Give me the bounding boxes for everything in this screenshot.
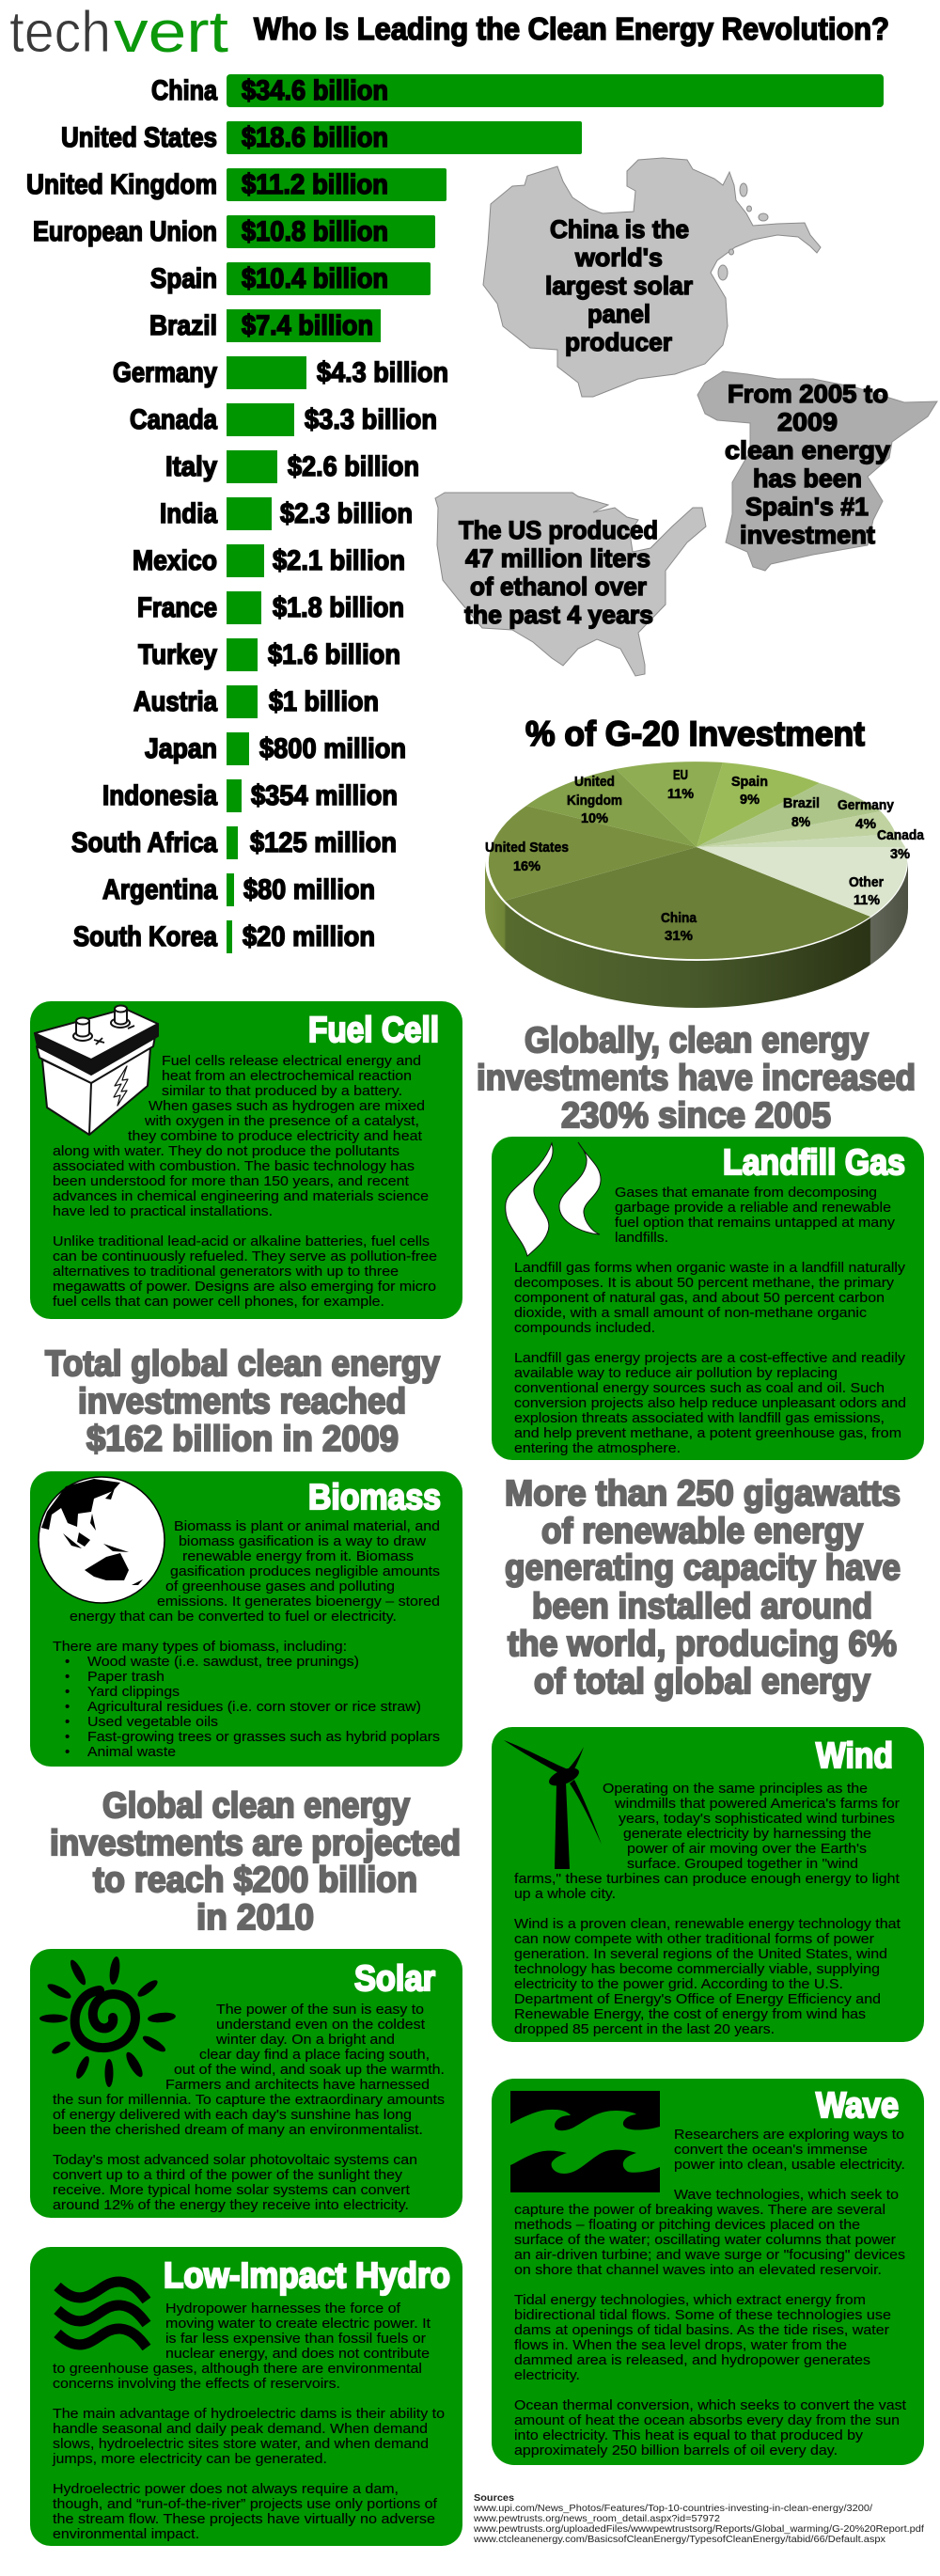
callout text: 47 million liters [465,544,650,573]
body text: the stream flow. These projects have virtually no adverse [53,2511,435,2527]
body text: methods – floating or pitching devices placed on the [514,2217,860,2233]
body text: farms," these turbines can produce enough energy to light [514,1871,901,1887]
body text: of energy delivered with each day's sunshine has long [53,2107,412,2123]
body text: bidirectional tidal flows. Some of these technologies use [514,2307,891,2323]
chart heading: % of G-20 Investment: % of G-20 Investment [525,715,865,753]
callout text: From 2005 to [728,380,888,408]
body text: dammed area is released, and hydropower generates [514,2352,870,2368]
body text: been understood for more than 150 years, and recent [53,1173,410,1189]
slice: China [505,847,870,959]
statistic: total global investments [45,1344,440,1459]
body text [53,1518,440,1655]
body text: fuel cells that can power cell phones, for example. [53,1294,384,1310]
body text: landfills. [615,1230,668,1246]
row: Germany: Germany [113,357,217,388]
biomass list: Yard clippings [87,1684,180,1700]
slice: EU [616,762,723,847]
body text: There are many types of biomass, including: [53,1639,347,1655]
body text: Wave technologies, which seek to [674,2187,899,2203]
statistic: 2010 projection: investments are projected [50,1824,461,1863]
body text: surface. Grouped together in "wind [627,1856,858,1872]
row: Brazil: $7.4 billion [242,310,373,341]
panel background [30,1949,462,2218]
body text: associated with combustion. The basic technology has [53,1158,415,1174]
body text: garbage provide a reliable and renewable [615,1200,891,1216]
pie labels: 16% [513,859,540,874]
body text: of greenhouse gases and polluting [165,1579,395,1594]
sources: www.pewtrusts.org/news_room_detail.aspx?id=57972 [473,2513,720,2524]
row: China: $34.6 billion [242,75,388,106]
body text: they combine to produce electricity and heat [128,1128,423,1144]
body text: Gases that emanate from decomposing [615,1185,877,1201]
row: India [160,497,413,530]
row: Brazil [149,309,381,342]
row: Brazil: Brazil [149,310,217,341]
row: China [151,74,884,107]
body text: explosion threats associated with landfill gas emissions, [514,1410,885,1426]
pie labels: 3% [890,847,910,862]
body text: Unlike traditional lead-acid or alkaline batteries, fuel cells [53,1233,430,1249]
row: Italy [165,450,419,483]
callout text: The US produced [459,516,658,544]
row: France [137,591,404,624]
pie labels [485,768,925,944]
body text: an air-driven turbine; and wave surge or "focusing" devices [514,2247,905,2263]
body text: The power of the sun is easy to [216,2002,424,2018]
biomass list: • [65,1654,70,1670]
body text: dropped 85 percent in the last 20 years. [514,2021,775,2037]
biomass list: Paper trash [87,1669,164,1685]
body text: have led to practical installations. [53,1203,273,1219]
panel: Fuel Cell [30,1001,462,1319]
statistic: renewable capacity [505,1474,901,1702]
logo: techvert [9,0,228,65]
body text: into electricity. This heat is equal to that produced by [514,2427,864,2443]
statistic: investment growth [477,1021,916,1136]
body text: Researchers are exploring ways to [674,2127,904,2143]
body text: available way to reduce air pollution by replacing [514,1365,838,1381]
callout text: Spain's #1 [745,493,869,521]
map: United States [435,493,706,676]
heading: Low-Impact Hydro [164,2256,450,2296]
row: United States: United States [61,122,217,153]
map: China [483,158,821,397]
sources: Sources [474,2492,514,2504]
body text: flows in. When the sea level drops, water from the [514,2337,847,2353]
row: China: China [151,75,217,106]
body text: approximately 250 billion barrels of oil every day. [514,2442,838,2458]
panel background [30,2247,462,2546]
pie side [485,861,908,1008]
icon: rising gas [506,1142,601,1256]
callout text: has been [753,464,862,493]
statistic: renewable capacity: generating capacity have [505,1548,901,1588]
slice: Germany [697,811,896,847]
body text: megawatts of power. Designs are also emerging for micro [53,1279,436,1295]
row: Argentina [102,873,375,906]
row: Germany [113,356,448,389]
sources: www.pewtrusts.org/uploadedFiles/wwwpewtrustsorg/Reports/Global_warming/G-20%20Report.pdf [473,2523,924,2535]
pie labels: 10% [581,811,608,826]
row: Japan [145,732,406,765]
row: Germany: $4.3 billion [317,357,448,388]
row: United States [61,121,582,154]
pie labels: Spain [731,775,768,790]
row: Mexico: Mexico [133,545,217,576]
body text: Ocean thermal conversion, which seeks to convert the vast [514,2397,907,2413]
sources: www.ctcleanenergy.com/BasicsofCleanEnergy/TypesofCleanEnergy/tabid/66/Default.aspx [473,2534,886,2545]
body text: windmills that powered America's farms for [614,1796,900,1812]
callout text: of ethanol over [470,573,647,601]
row: South Africa: South Africa [71,827,217,858]
row: Turkey: $1.6 billion [268,639,400,670]
statistic: investment growth: investments have increased [477,1059,916,1098]
body text [52,2301,445,2542]
row: Spain [150,262,431,295]
body text: surface of the water; oscillating water columns that power [514,2232,896,2248]
slice: United States [489,806,697,901]
row: European Union: European Union [33,216,217,247]
body text: alternatives to traditional generators with up to three [53,1264,399,1280]
callout text: largest solar [545,272,693,300]
pie labels: 9% [740,793,760,808]
body text: emissions. It generates bioenergy – stored [157,1594,440,1610]
map: Spain [697,371,937,571]
callout text: investment [740,521,875,549]
pie labels: Canada [877,828,925,843]
body text: electricity to the power grid. According to the U.S. [514,1976,843,1992]
sources [473,2492,924,2545]
biomass list: Agricultural residues (i.e. corn stover or rice straw) [87,1699,421,1715]
body text: is far less expensive than fossil fuels or [165,2331,426,2347]
row: Italy: $2.6 billion [288,451,419,482]
body text: Renewable Energy, the cost of energy from wind has [514,2006,866,2022]
row: Argentina: Argentina [102,874,217,905]
body text: component of natural gas, and about 50 percent carbon [514,1290,885,1306]
callout text: panel [588,300,650,328]
statistic: renewable capacity: More than 250 gigawatts [505,1474,901,1514]
body text: heat from an electrochemical reaction [162,1068,412,1084]
row: Japan: $800 million [259,733,406,764]
biomass list: Fast-growing trees or grasses such as hybrid poplars [87,1729,440,1745]
panel: Landfill Gas [492,1137,924,1460]
body text: Today's most advanced solar photovoltaic systems can [53,2152,417,2168]
pie labels: Other [849,875,884,890]
body text: been the cherished dream of many an environmentalist. [53,2122,423,2138]
row: Spain: $10.4 billion [242,263,388,294]
row: Indonesia: $354 million [251,780,398,811]
statistic: total global investments: Total global clean energy [45,1344,440,1384]
logo: techvert: vert [114,0,228,65]
body text: energy that can be converted to fuel or electricity. [70,1609,397,1625]
body text: out of the wind, and soak up the warmth. [174,2062,445,2078]
body text: Biomass is plant or animal material, and [174,1518,440,1534]
row: Canada [130,403,437,436]
body text: up a whole city. [514,1886,616,1902]
body text: electricity. [514,2367,580,2383]
row: Austria [133,685,379,718]
callout text [725,380,890,549]
pie labels: China [661,911,697,926]
slice: United Kingdom [526,769,697,847]
body text: though, and “run-of-the-river” projects use only portions of [53,2496,438,2512]
body text: dams at openings of tidal basins. As the tide rises, water [514,2322,889,2338]
row: France: $1.8 billion [273,592,404,623]
body text: Operating on the same principles as the [603,1781,868,1797]
biomass list: • [65,1729,70,1745]
logo: techvert: tech [9,0,111,65]
heading: Solar [354,1959,435,1999]
panel: Solar [30,1949,462,2218]
body text: on shore that channel waves into an elevated reservoir. [514,2262,882,2278]
icon: spiral sun [39,1956,176,2087]
slice: Brazil [697,783,881,847]
row: Argentina: $80 million [243,874,375,905]
heading: Landfill Gas [723,1143,905,1183]
biomass list [65,1654,440,1760]
pie labels: 4% [855,817,876,832]
biomass list: Used vegetable oils [87,1714,218,1730]
row: Austria: Austria [133,686,217,717]
row: Mexico: $2.1 billion [273,545,405,576]
biomass list: • [65,1699,70,1715]
body text: dioxide, with a small amount of non-methane organic [514,1305,868,1321]
row: India: India [160,498,217,529]
body text: compounds included. [514,1320,655,1336]
panel background [492,1137,924,1460]
callout text: clean energy [725,436,890,464]
body text: conversion projects also help reduce unpleasant odors and [514,1395,906,1411]
statistic: 2010 projection [50,1786,461,1938]
body text: convert the ocean's immense [674,2142,868,2158]
biomass list: • [65,1714,70,1730]
icon: water waves [57,2282,147,2348]
body text: Landfill gas energy projects are a cost-effective and readily [514,1350,906,1366]
icon: wind turbine [504,1740,602,1869]
body text: can be continuously refueled. They serve as pollution-free [53,1249,437,1264]
body text: decomposes. It is about 50 percent methane, the primary [514,1275,895,1291]
body text: slows, hydroelectric sites store water, and when demand [53,2436,429,2452]
statistic: total global investments: $162 billion in 2009 [86,1420,399,1459]
body text: advances in chemical engineering and materials science [53,1188,429,1204]
body text: similar to that produced by a battery. [162,1083,402,1099]
row: Indonesia: Indonesia [102,780,217,811]
biomass list: • [65,1669,70,1685]
body text: Hydroelectric power does not always require a dam, [53,2481,399,2497]
body text [514,1781,901,2037]
pie labels: 8% [791,815,810,830]
statistic: investment growth: 230% since 2005 [561,1096,831,1136]
body text: Tidal energy technologies, which extract energy from [514,2292,866,2308]
body text: environmental impact. [53,2526,199,2542]
body text: around 12% of the energy they receive into electricity. [53,2197,409,2213]
map callout: Spain [697,371,937,571]
body text: When gases such as hydrogen are mixed [149,1098,425,1114]
row: United States: $18.6 billion [242,122,388,153]
body text: Landfill gas forms when organic waste in a landfill naturally [514,1260,906,1276]
pie labels: EU [673,768,688,783]
title: Who Is Leading the Clean Energy Revolution? [254,11,889,46]
body text: concerns involving the effects of reservoirs. [53,2376,340,2392]
statistic: renewable capacity: the world, producing 6% [508,1625,897,1664]
row: Italy: Italy [165,451,217,482]
body text: amount of heat the ocean absorbs every day from the sun [514,2412,900,2428]
panel: Wind [492,1727,924,2042]
row: Turkey: Turkey [138,639,217,670]
body text: power of air moving over the Earth's [627,1841,867,1857]
pie labels: United States [485,840,569,856]
map callout: China [483,158,821,397]
body text: Wind is a proven clean, renewable energy technology that [514,1916,901,1932]
body text: fuel option that remains untapped at many [615,1215,896,1231]
row: South Africa: $125 million [250,827,397,858]
body text: gasification produces negligible amounts [170,1563,440,1579]
row: South Korea: $20 million [243,921,375,952]
panel: Biomass [30,1471,462,1767]
panel: Wave [492,2079,924,2465]
row: France: France [137,592,217,623]
body text: along with water. They do not produce the pollutants [53,1143,400,1159]
panel: Low-Impact Hydro [30,2247,462,2546]
pie labels: Germany [838,798,894,813]
statistic: investment growth: Globally, clean energy [525,1021,869,1060]
row: South Korea [73,920,375,953]
body text: convert up to a third of the power of the sunlight they [53,2167,403,2183]
slice: Spain [697,762,820,847]
body text: clear day find a place facing south, [199,2047,430,2063]
row: India: $2.3 billion [280,498,413,529]
pie labels: 31% [665,929,693,944]
row: Canada: Canada [130,404,217,435]
row: Spain: Spain [150,263,217,294]
biomass list: Wood waste (i.e. sawdust, tree prunings) [87,1654,359,1670]
body text: generate electricity by harnessing the [623,1826,871,1842]
body text: The main advantage of hydroelectric dams is their ability to [53,2406,445,2422]
body text: and help prevent methane, a potent greenhouse gas, from [514,1425,901,1441]
body text: Farmers and architects have harnessed [165,2077,430,2093]
body text: capture the power of breaking waves. There are several [514,2202,885,2218]
body text: technology has become commercially viable, supplying [514,1961,880,1977]
row: Turkey [138,638,400,671]
panel background [492,2079,924,2465]
pie labels: Brazil [783,796,820,811]
icon: waves [510,2091,660,2192]
callout text: China is the [550,215,689,243]
statistic: renewable capacity: of renewable energy [541,1512,863,1551]
icon: battery [35,1006,158,1135]
body text: renewable energy from it. Biomass [182,1548,414,1564]
statistic: total global investments: investments reached [78,1382,406,1422]
row: United Kingdom [26,168,446,201]
body text: nuclear energy, and does not contribute [165,2346,430,2362]
statistic: 2010 projection: to reach $200 billion [93,1861,417,1900]
row: South Korea: South Korea [73,921,217,952]
statistic: renewable capacity: of total global energy [534,1662,870,1702]
statistic: 2010 projection: in 2010 [196,1898,314,1938]
panel background [30,1471,462,1767]
body text: handle seasonal and daily peak demand. When demand [53,2421,428,2437]
body text [53,2002,445,2213]
body text: entering the atmosphere. [514,1440,681,1456]
body text: moving water to create electric power. It [165,2316,431,2332]
body text: understand even on the coldest [216,2017,426,2033]
body text: receive. More typical home solar systems can convert [53,2182,411,2198]
heading: Fuel Cell [308,1011,439,1050]
body text: Fuel cells release electrical energy and [162,1053,421,1069]
pie labels: United [574,775,615,790]
bar chart: clean energy investment by country [26,74,884,953]
panel background [492,1727,924,2042]
row: Austria: $1 billion [269,686,379,717]
biomass list: • [65,1744,70,1760]
body text: to greenhouse gases, although there are environmental [53,2361,422,2377]
body text [53,1053,437,1310]
body text: with oxygen in the presence of a catalyst, [144,1113,419,1129]
body text: winter day. On a bright and [215,2032,395,2048]
body text: the sun for millennia. To capture the extraordinary amounts [53,2092,445,2108]
callout text [545,215,693,356]
body text: can now compete with other traditional forms of power [514,1931,874,1947]
row: European Union: $10.8 billion [242,216,388,247]
body text: jumps, more electricity can be generated. [52,2451,327,2467]
callout text: producer [565,328,672,356]
pie chart: % of G-20 investment [485,762,925,1008]
pie labels: 11% [854,893,880,908]
row: Canada: $3.3 billion [305,404,437,435]
body text: power into clean, usable electricity. [674,2157,905,2173]
row: South Africa [71,826,397,859]
body text [514,2127,907,2458]
heading: Wind [816,1736,893,1776]
biomass list: • [65,1684,70,1700]
callout text [459,516,658,629]
callout text: 2009 [777,408,838,436]
row: Mexico [133,544,405,577]
row: Indonesia [102,779,398,812]
row: European Union [33,215,435,248]
row: United Kingdom: $11.2 billion [242,169,388,200]
body text: conventional energy sources such as coal and oil. Such [514,1380,885,1396]
sources: www.upi.com/News_Photos/Features/Top-10-countries-investing-in-clean-energy/3200/ [473,2503,872,2514]
callout text: the past 4 years [464,601,653,629]
icon: globe [39,1477,164,1603]
pie labels: Kingdom [567,793,622,809]
body text: years, today's sophisticated wind turbines [619,1811,895,1827]
panel background [30,1001,462,1319]
row: United Kingdom: United Kingdom [26,169,217,200]
statistic: renewable capacity: been installed around [532,1587,872,1626]
statistic: 2010 projection: Global clean energy [102,1786,410,1826]
body text: Department of Energy's Office of Energy Efficiency and [514,1991,881,2007]
body text [514,1185,906,1456]
heading: Wave [816,2086,899,2126]
biomass list: Animal waste [87,1744,176,1760]
body text: biomass gasification is a way to draw [179,1533,426,1549]
slice: Other [697,847,907,917]
slice: Canada [697,834,905,847]
body text: generation. In several regions of the United States, wind [514,1946,887,1962]
callout text: world's [574,243,663,272]
map callout: United States [435,493,706,676]
body text: Hydropower harnesses the force of [165,2301,401,2317]
pie labels: 11% [667,787,694,802]
heading: Biomass [308,1478,441,1517]
row: Japan: Japan [145,733,217,764]
